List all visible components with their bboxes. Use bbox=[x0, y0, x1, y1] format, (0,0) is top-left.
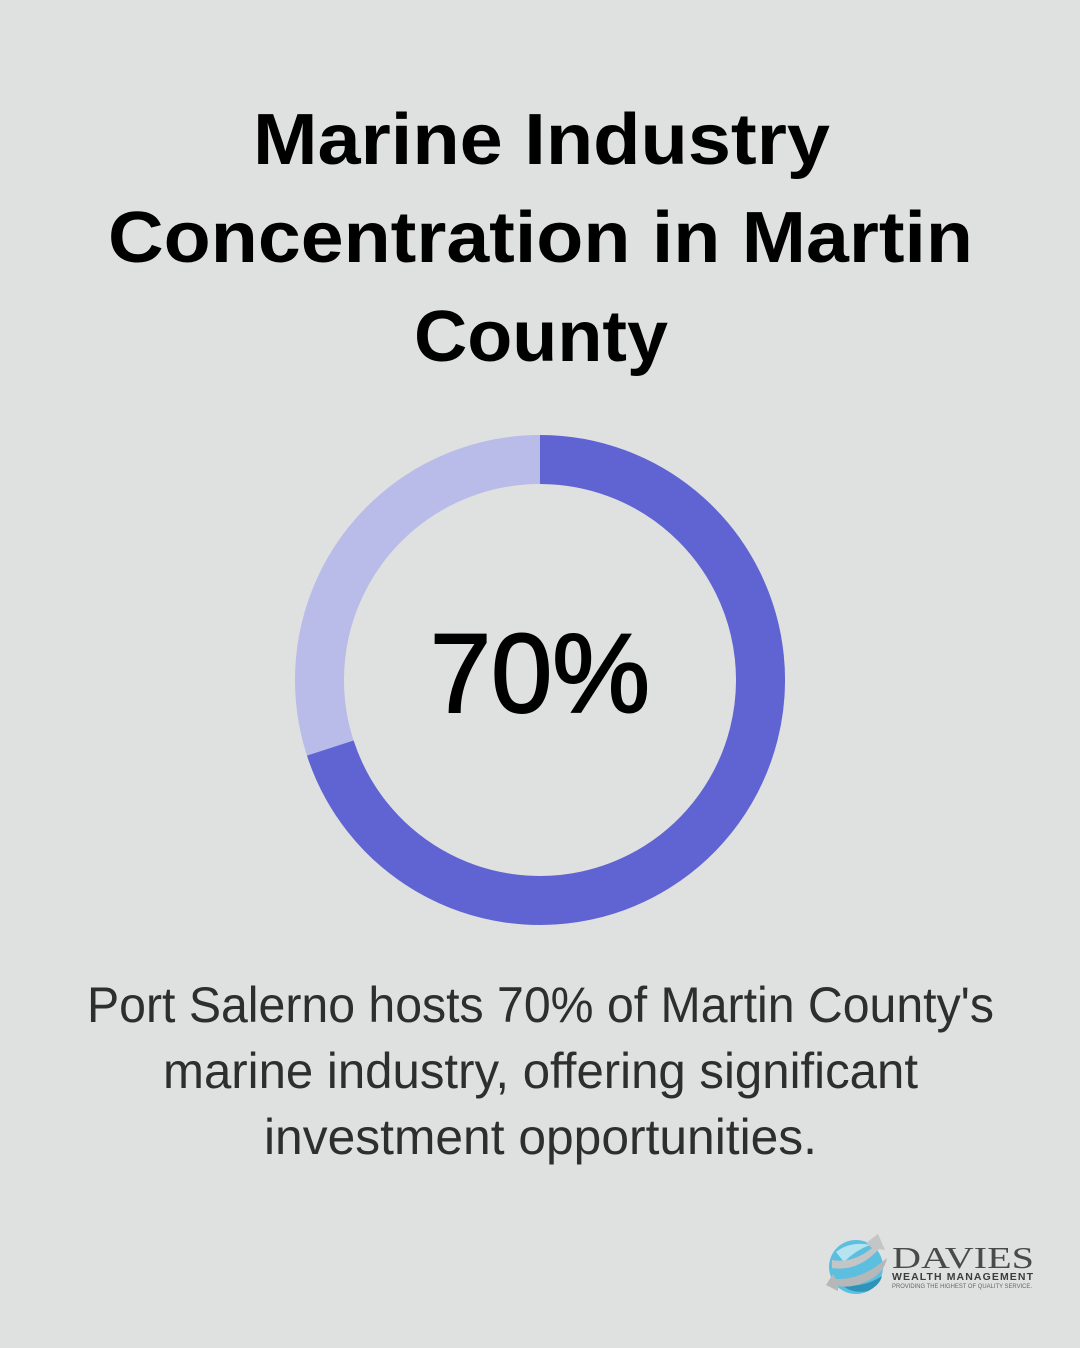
description text: investment opportunities. bbox=[264, 1109, 817, 1165]
title: Concentration in Martin bbox=[108, 198, 973, 278]
logo: Davies Wealth Management bbox=[826, 1234, 1034, 1294]
logo subtitle: WEALTH MANAGEMENT bbox=[892, 1271, 1034, 1283]
donut value: 70% bbox=[430, 611, 650, 736]
description text: marine industry, offering significant bbox=[163, 1043, 918, 1099]
description text bbox=[87, 977, 994, 1165]
description text: Port Salerno hosts 70% of Martin County's bbox=[87, 977, 994, 1033]
logo tagline: PROVIDING THE HIGHEST OF QUALITY SERVICE. bbox=[892, 1283, 1032, 1290]
title: Marine Industry bbox=[253, 100, 830, 180]
logo wordmark: DAVIES bbox=[892, 1240, 1034, 1275]
title bbox=[108, 100, 973, 377]
icon: globe with arrows bbox=[826, 1234, 887, 1294]
title: County bbox=[414, 297, 668, 377]
donut chart: 70 percent bbox=[320, 460, 761, 900]
